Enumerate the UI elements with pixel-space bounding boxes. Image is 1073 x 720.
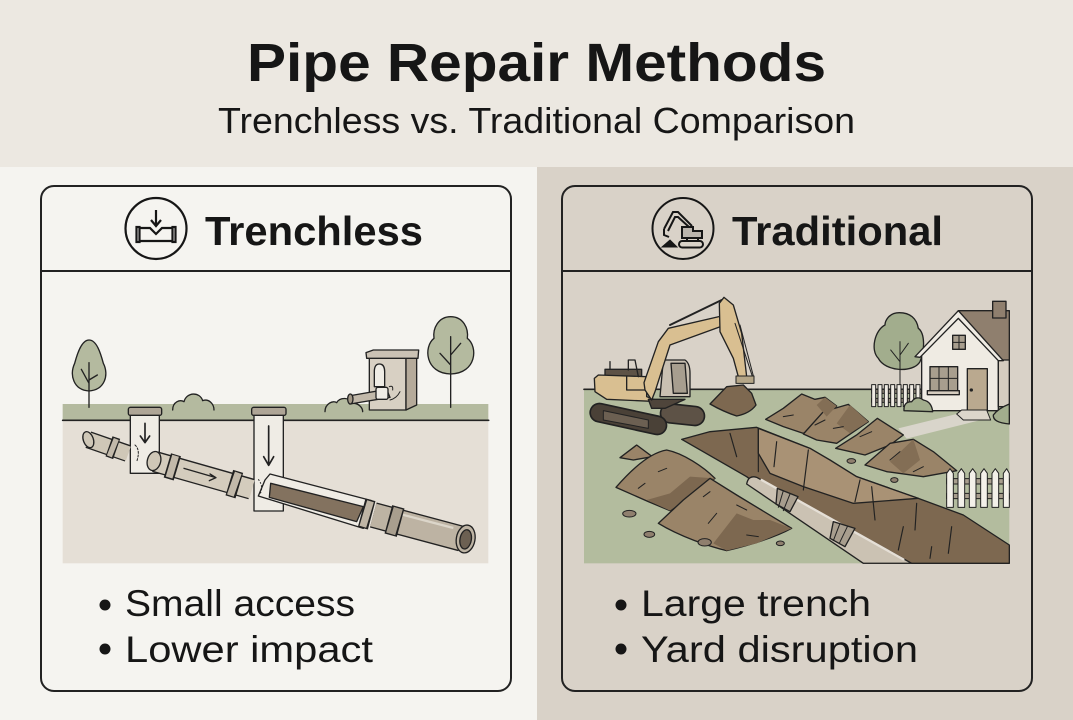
front soil piles xyxy=(616,445,792,551)
panel: trenchless xyxy=(41,186,511,691)
bullets: traditional: Yard disruption xyxy=(641,629,918,670)
near track xyxy=(599,413,657,425)
bucket xyxy=(710,385,756,416)
bullets: traditional xyxy=(616,583,918,670)
icon: excavator xyxy=(652,198,714,259)
title: Pipe Repair Methods xyxy=(247,33,826,93)
path xyxy=(898,414,983,439)
illustration: excavated trench xyxy=(584,297,1009,563)
access box xyxy=(348,350,419,410)
bullets: trenchless: Small access xyxy=(125,583,355,624)
back soil piles xyxy=(766,394,957,477)
heading: traditional: Traditional xyxy=(732,208,943,254)
illustration: trenchless pipe lining xyxy=(63,317,489,563)
ground xyxy=(63,404,488,563)
header band xyxy=(0,0,1073,167)
back fence xyxy=(872,385,922,407)
icon: pipe with arrow xyxy=(126,198,186,259)
pipe segments xyxy=(81,430,252,489)
shrubs xyxy=(173,394,363,412)
shrubs xyxy=(904,398,1009,424)
stick xyxy=(719,297,747,377)
bullets: traditional: Large trench xyxy=(641,583,871,624)
boom xyxy=(644,316,725,400)
far track xyxy=(670,413,695,416)
house xyxy=(915,301,1009,420)
front fence xyxy=(947,469,1009,507)
stones xyxy=(623,459,898,546)
bullets: trenchless xyxy=(100,583,374,670)
panel: traditional xyxy=(562,186,1032,691)
tree right xyxy=(428,317,474,407)
lawn xyxy=(584,389,1009,563)
shaft 1 xyxy=(128,407,162,473)
heading: trenchless: Trenchless xyxy=(205,208,423,254)
body xyxy=(605,369,642,377)
lined section xyxy=(258,474,477,554)
shaft 2 xyxy=(252,407,286,511)
tree xyxy=(874,313,924,385)
cab xyxy=(660,360,690,397)
tree left xyxy=(72,340,106,407)
trench xyxy=(682,427,1009,563)
bullets: trenchless: Lower impact xyxy=(125,629,374,670)
excavator xyxy=(594,297,756,428)
pipe in trench xyxy=(747,477,912,563)
subtitle: Trenchless vs. Traditional Comparison xyxy=(218,100,855,141)
